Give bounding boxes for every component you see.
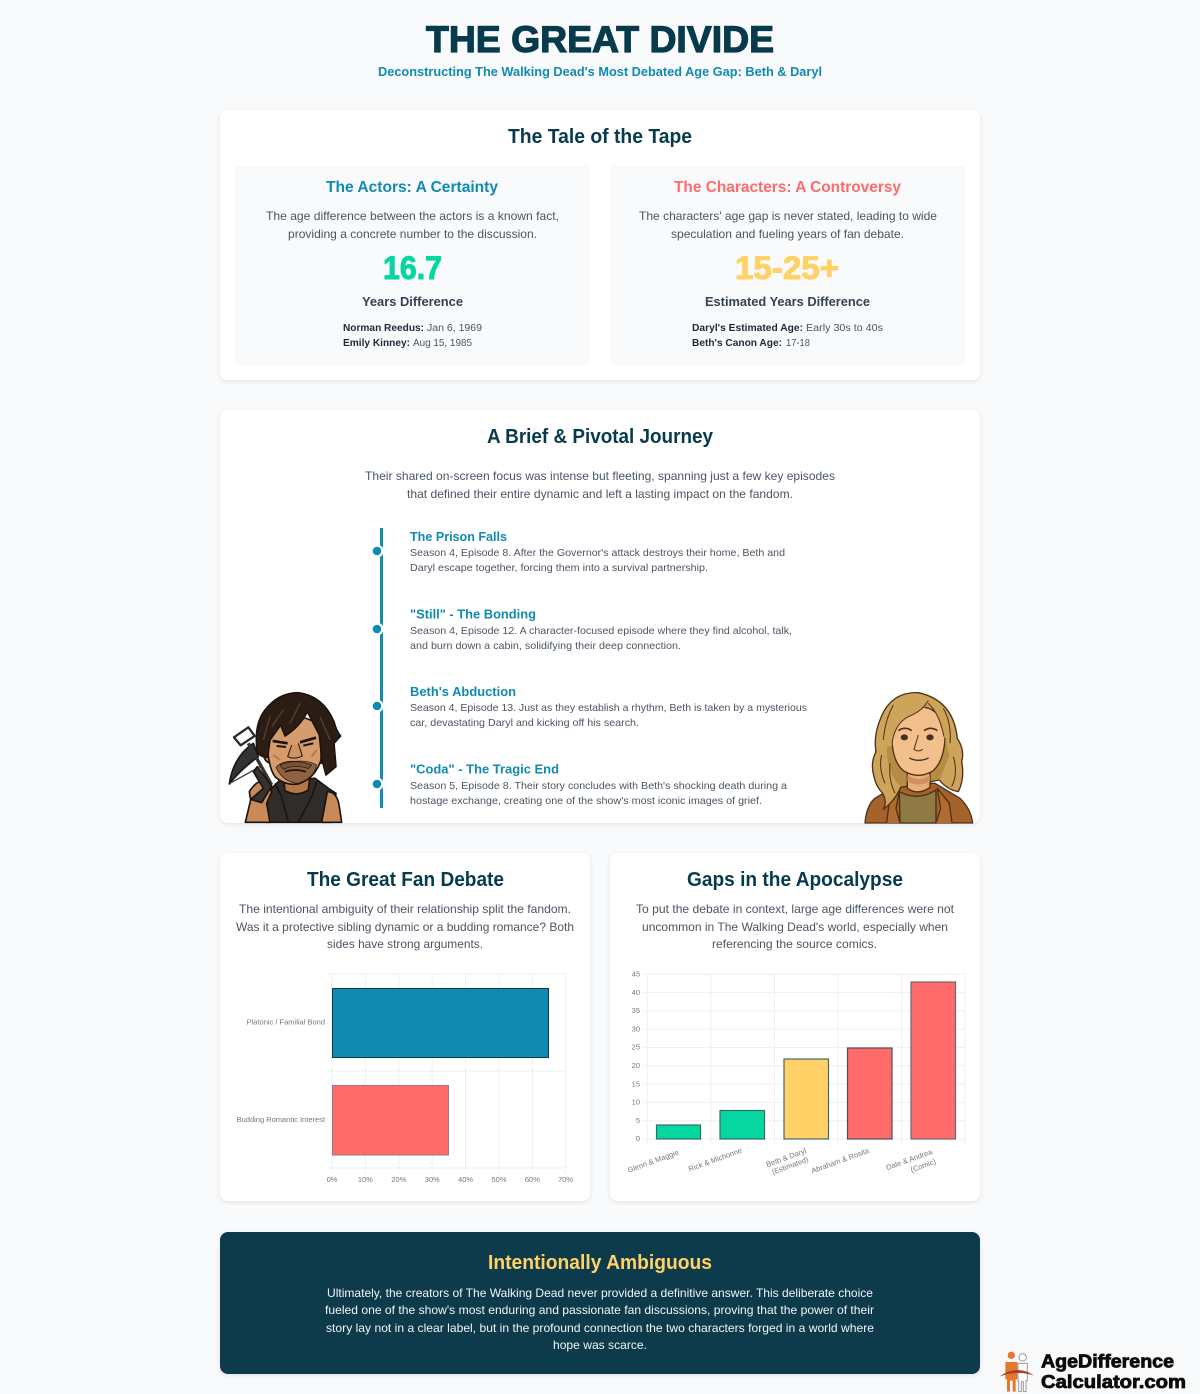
bar chart: age gaps: 20 — [632, 1061, 640, 1070]
bar chart: platonic vs romantic: Platonic / Familial Bond — [247, 1018, 325, 1026]
heading: fan debate: The Great Fan Debate — [307, 869, 504, 891]
heading: tale of the tape: The Tale of the Tape — [508, 126, 692, 148]
panel: the characters: 15-25+ — [735, 250, 839, 286]
bar chart: platonic vs romantic: 10% — [358, 1175, 373, 1184]
gaps description: To put the debate in context, large age differences were not — [636, 902, 955, 916]
bar chart: platonic vs romantic: 60% — [525, 1175, 540, 1184]
panel: the characters — [610, 165, 965, 365]
debate description: sides have strong arguments. — [327, 937, 483, 951]
callout: intentionally ambiguous: Ultimately, the creators of The Walking Dead never provided a definitive answer. This deliberate choice — [327, 1286, 873, 1300]
debate description — [236, 902, 574, 951]
timeline item: the prison falls: Daryl escape together, forcing them into a survival partnership. — [410, 562, 708, 574]
bar chart: platonic vs romantic: 70% — [558, 1175, 573, 1184]
timeline item: coda: "Coda" - The Tragic End — [410, 762, 559, 776]
panel: the actors: Aug 15, 1985 — [413, 337, 472, 349]
panel: the characters: speculation and fueling years of fan debate. — [671, 227, 904, 241]
bar chart: age gaps: Glenn & Maggie — [626, 1148, 680, 1175]
panel: gaps in the apocalypse — [610, 853, 980, 1201]
icon: daryl cartoon — [229, 693, 342, 822]
timeline item: beth's abduction: Season 4, Episode 13. Just as they establish a rhythm, Beth is taken by a mysterious — [410, 702, 807, 714]
bar chart: age gaps: (Comic) — [909, 1157, 937, 1174]
timeline item: coda: hostage exchange, creating one of the show's most iconic images of grief. — [410, 795, 762, 807]
callout: intentionally ambiguous: Intentionally Ambiguous — [488, 1252, 712, 1274]
bar chart: age gaps: 15 — [632, 1079, 640, 1088]
panel: the great fan debate — [220, 853, 590, 1201]
panel: the characters: 17-18 — [786, 337, 810, 349]
logo: age difference calculator — [999, 1350, 1186, 1392]
bar chart: platonic vs romantic: 40% — [458, 1175, 473, 1184]
panel: the characters: The characters' age gap is never stated, leading to wide — [639, 209, 937, 223]
journey intro — [365, 469, 835, 501]
timeline item: beth's abduction — [370, 684, 807, 729]
timeline item: still: and burn down a cabin, solidifying their deep connection. — [410, 640, 681, 652]
timeline — [370, 528, 807, 808]
bar chart: age gaps: Abraham & Rosita — [810, 1146, 871, 1175]
bar chart: age gaps: Beth & Daryl — [765, 1146, 808, 1169]
panel: the actors: Emily Kinney: — [343, 337, 410, 349]
timeline item: beth's abduction: car, devastating Daryl and kicking off his search. — [410, 717, 639, 729]
bar chart: platonic vs romantic: 0% — [327, 1175, 338, 1184]
bar chart: age gaps: Rick & Michonne — [687, 1146, 743, 1174]
timeline item: still — [370, 606, 792, 652]
bar chart: age gaps: (Estimated) — [771, 1155, 810, 1176]
bar chart: age gaps: 35 — [632, 1006, 640, 1015]
timeline item: the prison falls: Season 4, Episode 8. After the Governor's attack destroys their home, Beth and — [410, 547, 785, 559]
panel: the actors: The Actors: A Certainty — [326, 179, 498, 196]
timeline item: the prison falls — [370, 529, 785, 574]
debate description: The intentional ambiguity of their relationship split the fandom. — [239, 902, 571, 916]
heading: gaps: Gaps in the Apocalypse — [687, 869, 903, 891]
bar chart: age gaps: 10 — [632, 1098, 640, 1107]
bar chart: age gaps: 25 — [632, 1043, 640, 1052]
bar chart: platonic vs romantic: 30% — [425, 1175, 440, 1184]
logo: age difference calculator: Calculator.com — [1041, 1371, 1186, 1392]
panel: the actors: 16.7 — [383, 250, 442, 286]
timeline item: still: "Still" - The Bonding — [410, 606, 536, 622]
panel: the characters: The Characters: A Controversy — [674, 179, 901, 196]
gaps description — [636, 902, 955, 951]
callout: intentionally ambiguous: story lay not in a clear label, but in the profound connection the two characters forged in a world where — [326, 1321, 874, 1335]
callout: intentionally ambiguous: hope was scarce. — [553, 1338, 647, 1352]
callout: intentionally ambiguous: fueled one of the show's most enduring and passionate fan discussions, proving that the power of their — [325, 1303, 874, 1317]
panel: a brief and pivotal journey — [220, 410, 980, 823]
bar chart: age gaps: 0 — [636, 1134, 640, 1143]
icon: beth cartoon — [865, 693, 973, 823]
journey intro: that defined their entire dynamic and left a lasting impact on the fandom. — [407, 487, 793, 501]
callout: intentionally ambiguous — [220, 1232, 980, 1374]
panel: the actors: Jan 6, 1969 — [427, 322, 482, 334]
title: THE GREAT DIVIDE — [426, 19, 774, 60]
bar chart: age gaps: Dale & Andrea — [885, 1147, 934, 1172]
bar chart: age gaps — [626, 970, 965, 1176]
bar chart: age gaps: 45 — [632, 970, 640, 978]
panel: the actors: The age difference between the actors is a known fact, — [266, 209, 559, 223]
panel: the characters: Estimated Years Difference — [705, 294, 870, 309]
panel: the characters: Beth's Canon Age: — [692, 337, 782, 349]
timeline item: coda — [370, 762, 787, 807]
timeline item: still: Season 4, Episode 12. A character-focused episode where they find alcohol, talk, — [410, 625, 792, 637]
logo: age difference calculator: AgeDifference — [1041, 1350, 1174, 1372]
bar chart: age gaps: 30 — [632, 1024, 640, 1033]
timeline item: beth's abduction: Beth's Abduction — [410, 684, 516, 699]
bar chart: platonic vs romantic: 50% — [491, 1175, 507, 1184]
gaps description: referencing the source comics. — [712, 937, 877, 951]
timeline item: the prison falls: The Prison Falls — [410, 529, 507, 544]
journey intro: Their shared on-screen focus was intense but fleeting, spanning just a few key episodes — [365, 469, 835, 483]
bar chart: platonic vs romantic — [237, 974, 573, 1184]
bar chart: platonic vs romantic: Budding Romantic Interest — [237, 1115, 326, 1124]
panel: the tale of the tape — [220, 110, 980, 380]
bar chart: age gaps: 40 — [632, 988, 640, 997]
panel: the actors: Norman Reedus: — [343, 322, 424, 334]
panel: the characters: Daryl's Estimated Age: — [692, 322, 803, 334]
panel: the actors — [235, 165, 590, 365]
icon: logo people — [999, 1352, 1034, 1392]
panel: the characters: Early 30s to 40s — [806, 322, 883, 334]
gaps description: uncommon in The Walking Dead's world, especially when — [642, 920, 948, 934]
subtitle: Deconstructing The Walking Dead's Most Debated Age Gap: Beth & Daryl — [378, 64, 822, 79]
bar chart: age gaps: 5 — [636, 1116, 640, 1125]
debate description: Was it a protective sibling dynamic or a budding romance? Both — [236, 920, 574, 934]
panel: the actors: Years Difference — [362, 294, 463, 309]
heading: journey: A Brief & Pivotal Journey — [487, 426, 714, 448]
timeline item: coda: Season 5, Episode 8. Their story concludes with Beth's shocking death during a — [410, 780, 787, 792]
bar chart: platonic vs romantic: 20% — [391, 1175, 407, 1184]
panel: the actors: providing a concrete number to the discussion. — [288, 227, 537, 241]
